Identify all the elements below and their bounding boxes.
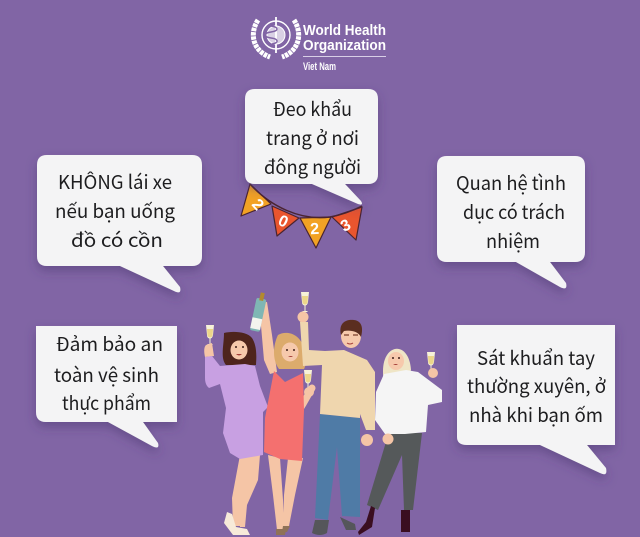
callout: hand hygiene: thường xuyên, ở [467, 372, 606, 399]
logo: WHO Viet Nam [253, 17, 386, 73]
logo wordmark: Viet Nam [303, 61, 336, 73]
callout: responsible sex: nhiệm [486, 227, 540, 254]
decoration: 2023 bunting [241, 184, 362, 248]
decoration: 2023 bunting: 2 [310, 221, 320, 238]
callout: responsible sex: dục có trách [463, 198, 565, 225]
callout: mask in crowded places: trang ở nơi [266, 124, 359, 151]
decoration: 2023 bunting: 3 [338, 216, 354, 236]
callout: food safety [36, 326, 177, 447]
callout: do not drink and drive: đồ có cồn [71, 226, 163, 253]
callout: mask in crowded places: Đeo khẩu [273, 95, 352, 122]
callout: mask in crowded places: đông người [264, 153, 361, 180]
callout: hand hygiene [457, 325, 615, 474]
callout: mask in crowded places [245, 89, 378, 205]
person: woman in lilac dress [204, 325, 268, 535]
callout: hand hygiene: Sát khuẩn tay [477, 344, 595, 371]
callout: do not drink and drive: nếu bạn uống [55, 197, 175, 224]
person: blonde woman in white blouse [358, 349, 442, 535]
callout: do not drink and drive [37, 155, 202, 292]
callout: responsible sex [437, 156, 585, 288]
callout: food safety: Đảm bảo an [56, 330, 163, 357]
logo wordmark [303, 23, 386, 73]
callout: responsible sex: Quan hệ tình [456, 169, 566, 196]
decoration: 2023 bunting: 2 [248, 196, 267, 214]
person: woman in coral dress [250, 292, 314, 535]
icon: WHO emblem [253, 17, 299, 57]
callout: food safety: toàn vệ sinh [54, 361, 159, 388]
logo wordmark: Organization [303, 38, 386, 54]
callout: hand hygiene: nhà khi bạn ốm [469, 401, 603, 428]
callout: do not drink and drive: KHÔNG lái xe [58, 168, 172, 195]
callout: food safety: thực phẩm [62, 389, 151, 416]
decoration: 2023 bunting: 0 [275, 212, 291, 232]
illustration: four people toasting [204, 292, 442, 535]
logo wordmark: World Health [303, 23, 386, 39]
person: man in beige sweater [298, 292, 375, 535]
